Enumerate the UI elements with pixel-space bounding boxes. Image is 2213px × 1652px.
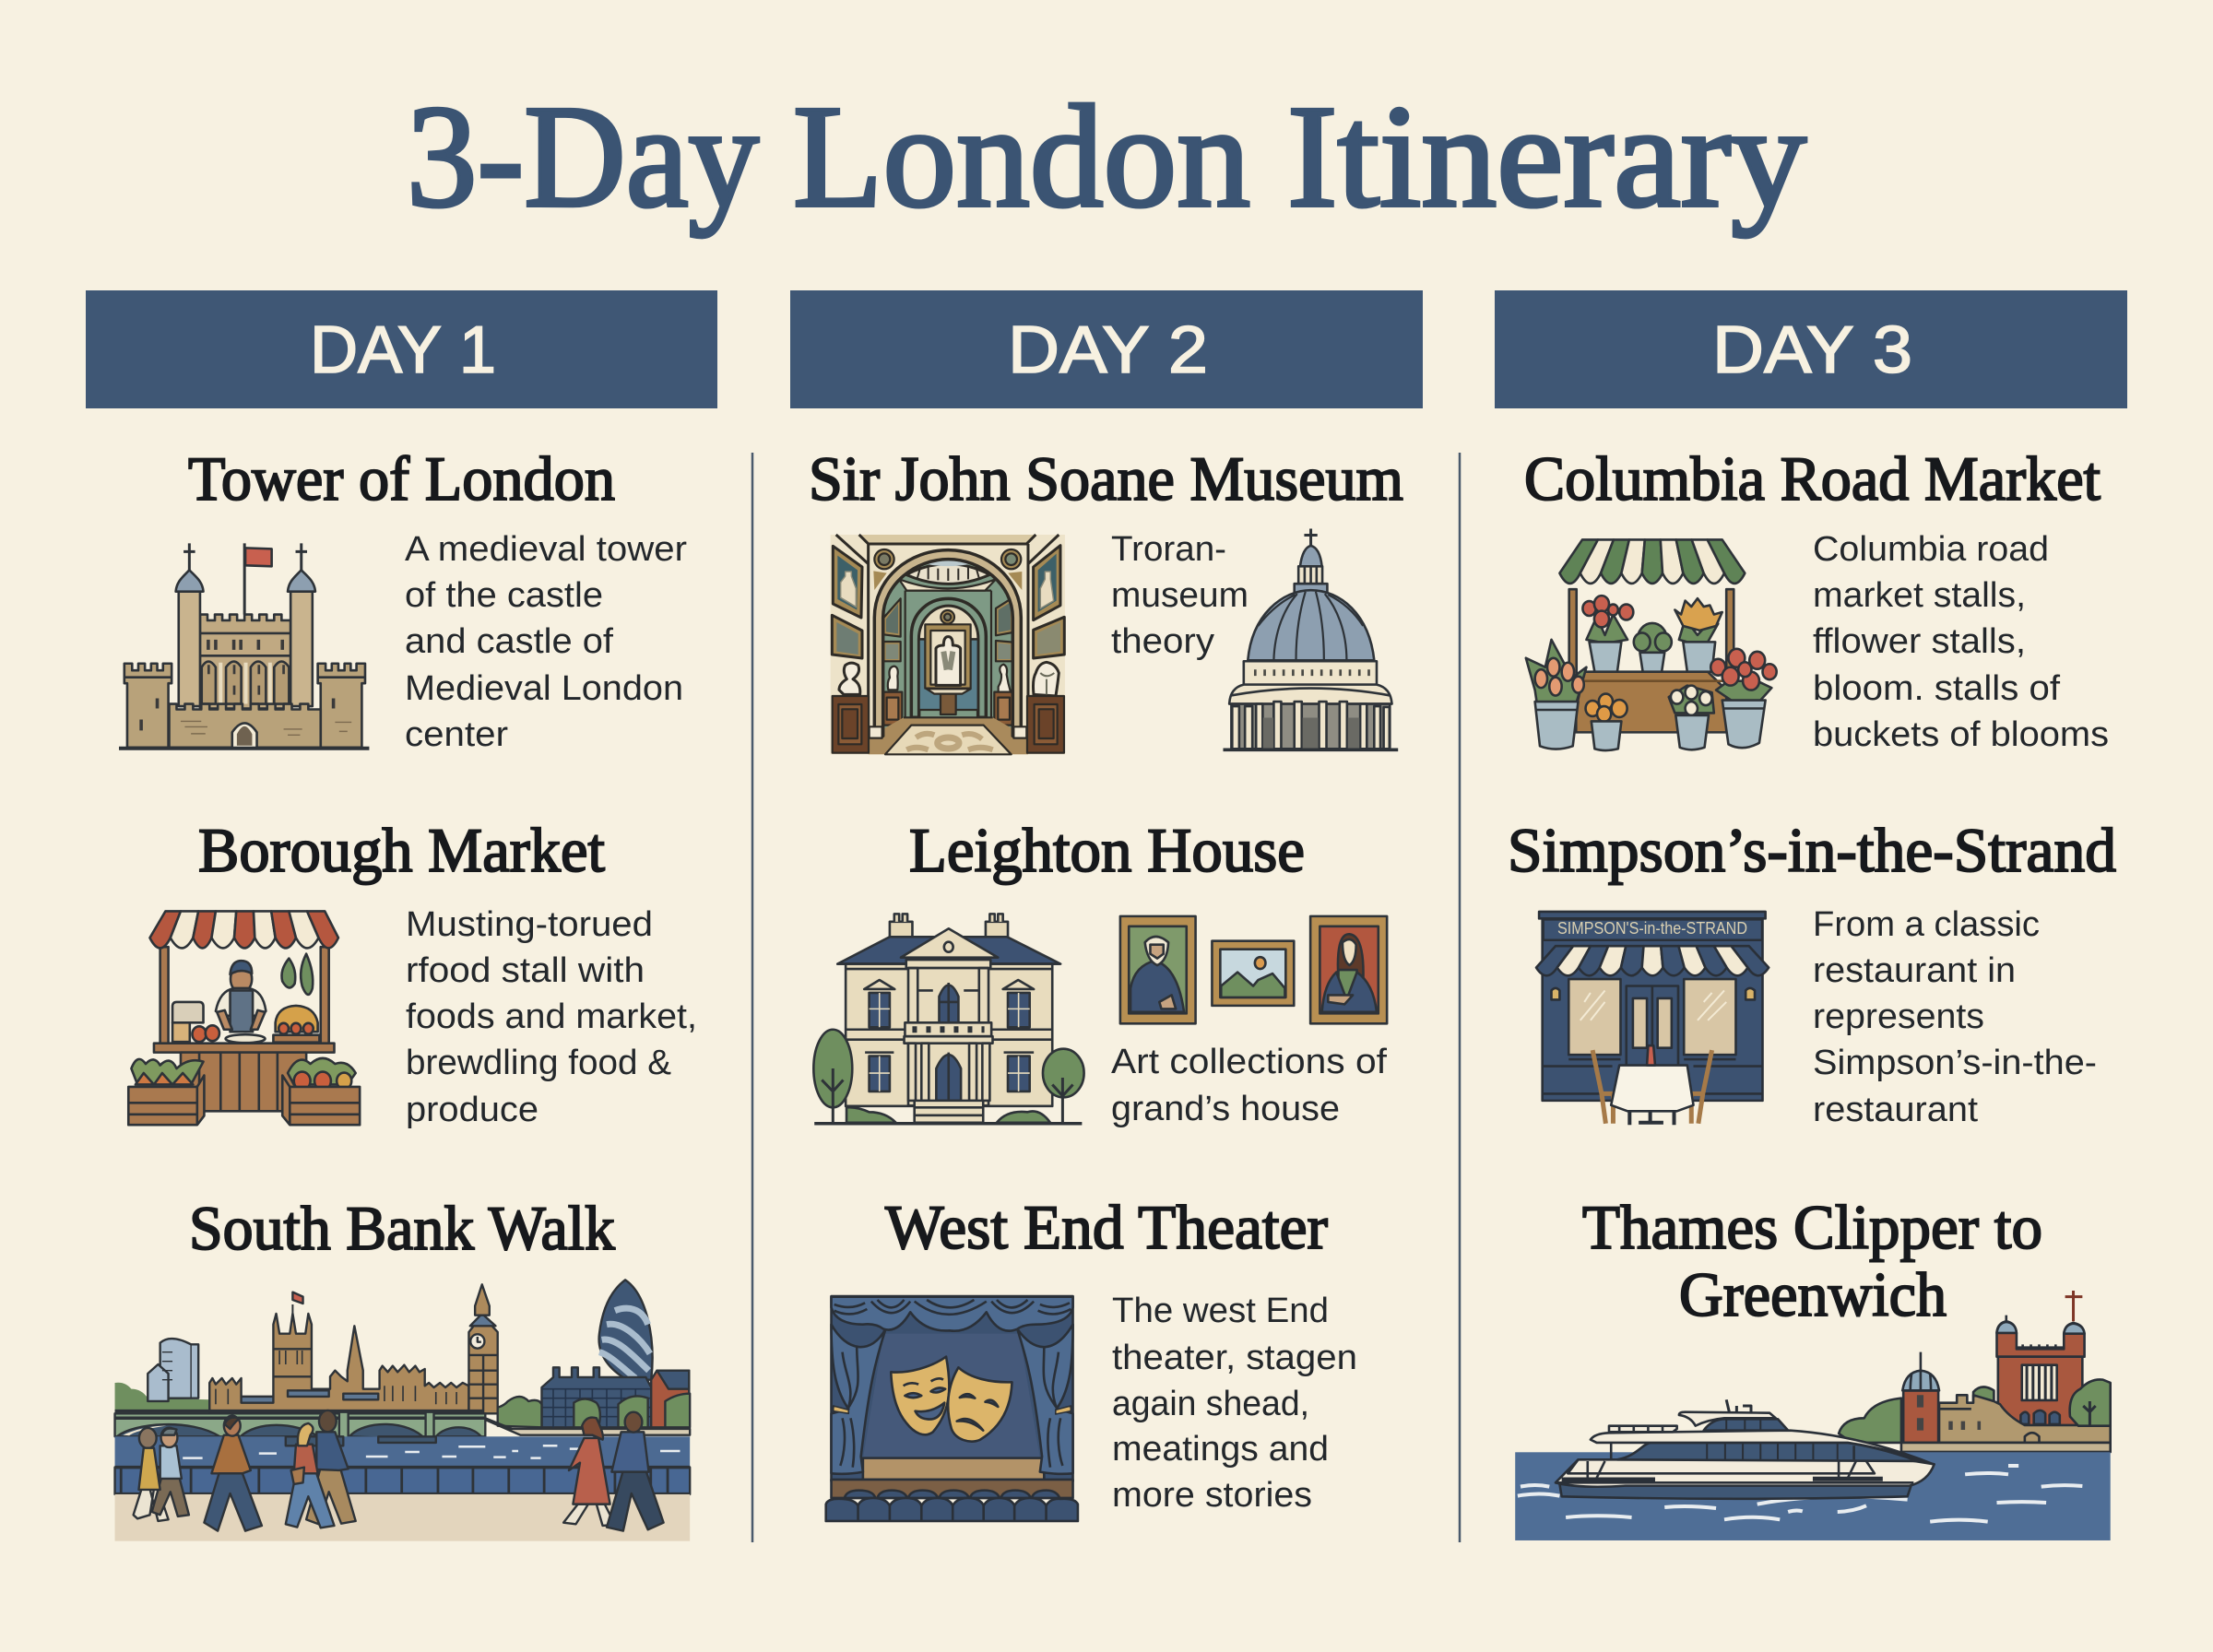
text: Columbia Road description: buckets of blooms xyxy=(1813,715,2109,754)
text: Columbia Road description: market stalls, xyxy=(1813,576,2026,615)
text: Soane description: museum xyxy=(1111,576,1249,615)
text: Simpson's description: From a classic xyxy=(1813,905,2040,944)
walkers xyxy=(134,1410,664,1531)
text: Simpson's description xyxy=(1813,905,2097,1129)
icon: domed cathedral xyxy=(1223,528,1398,749)
icon: flower market stall xyxy=(1526,539,1777,750)
text: Simpson's description: represents xyxy=(1813,997,1984,1036)
text: Tower of London description: of the castle xyxy=(405,576,603,615)
text: Leighton House description: Art collections of xyxy=(1111,1043,1387,1081)
day 2 header: DAY 2 xyxy=(1008,313,1208,387)
text: West End description: more stories xyxy=(1112,1476,1312,1515)
heading: Sir John Soane Museum: Sir John Soane Museum xyxy=(809,443,1403,513)
heading: Thames Clipper to Greenwich: Thames Clipper to xyxy=(1582,1192,2042,1262)
text: Borough Market description: brewdling food & xyxy=(406,1044,671,1082)
text: Tower of London description: and castle of xyxy=(405,622,613,661)
text: Borough Market description xyxy=(406,905,697,1129)
day 3 header: DAY 3 xyxy=(1712,313,1912,387)
text: Tower of London description xyxy=(405,530,687,754)
heading: Tower of London: Tower of London xyxy=(188,443,615,513)
icon: Simpson's restaurant facade xyxy=(1536,912,1769,1125)
sign text: SIMPSON'S-in-the-STRAND xyxy=(1557,919,1747,938)
text: Columbia Road description: fflower stalls, xyxy=(1813,622,2026,661)
text: Borough Market description: foods and market, xyxy=(406,997,697,1036)
illustration: South Bank skyline and walkers xyxy=(115,1280,690,1541)
day 1 header xyxy=(86,290,717,408)
text: West End description: meatings and xyxy=(1112,1430,1329,1469)
icon: three framed paintings xyxy=(1120,916,1387,1023)
icon: Borough Market food stall xyxy=(128,911,360,1125)
day 1 header: DAY 1 xyxy=(310,313,496,387)
text: Soane description xyxy=(1111,530,1249,661)
illustration: Soane museum interior xyxy=(831,535,1065,754)
title: London xyxy=(793,76,1250,238)
text: Simpson's description: restaurant xyxy=(1813,1091,1978,1129)
illustration: theater stage with masks xyxy=(826,1296,1078,1521)
heading: South Bank Walk: South Bank Walk xyxy=(189,1193,615,1263)
text: Borough Market description: produce xyxy=(406,1091,538,1129)
heading: Thames Clipper to Greenwich xyxy=(1582,1192,2042,1329)
text: Soane description: theory xyxy=(1111,622,1214,661)
heading: Leighton House: Leighton House xyxy=(909,815,1305,885)
day 3 header xyxy=(1495,290,2127,408)
text: Simpson's description: Simpson’s-in-the- xyxy=(1813,1044,2097,1082)
text: Borough Market description: rfood stall with xyxy=(406,951,645,990)
text: West End description: theater, stagen xyxy=(1112,1339,1357,1377)
title xyxy=(407,76,1806,238)
text: Soane description: Troran- xyxy=(1111,530,1226,569)
text: Leighton House description xyxy=(1111,1043,1387,1128)
text: Tower of London description: center xyxy=(405,715,508,754)
text: Columbia Road description xyxy=(1813,530,2109,754)
text: Columbia Road description: bloom. stalls of xyxy=(1813,669,2060,708)
text: West End description: The west End xyxy=(1112,1292,1329,1330)
text: Columbia Road description: Columbia road xyxy=(1813,530,2049,569)
text: Leighton House description: grand’s house xyxy=(1111,1090,1340,1128)
text: West End description xyxy=(1112,1292,1357,1515)
heading: Thames Clipper to Greenwich: Greenwich xyxy=(1679,1259,1947,1329)
heading: Columbia Road Market: Columbia Road Market xyxy=(1524,443,2101,513)
illustration: Thames Clipper boat and Greenwich xyxy=(1515,1291,2111,1540)
title: Itinerary xyxy=(1287,76,1806,238)
text: Tower of London description: Medieval London xyxy=(405,669,683,708)
icon: Leighton House building xyxy=(813,914,1084,1124)
text: West End description: again shead, xyxy=(1112,1385,1309,1423)
text: Tower of London description: A medieval tower xyxy=(405,530,687,569)
icon: Tower of London castle xyxy=(119,543,369,749)
title: 3-Day xyxy=(407,76,759,238)
day 2 header xyxy=(790,290,1423,408)
heading: Simpson's-in-the-Strand: Simpson’s-in-the-Strand xyxy=(1508,815,2116,885)
heading: West End Theater: West End Theater xyxy=(885,1192,1328,1262)
text: Simpson's description: restaurant in xyxy=(1813,951,2016,990)
text: Borough Market description: Musting-torued xyxy=(406,905,653,944)
heading: Borough Market: Borough Market xyxy=(198,815,605,885)
